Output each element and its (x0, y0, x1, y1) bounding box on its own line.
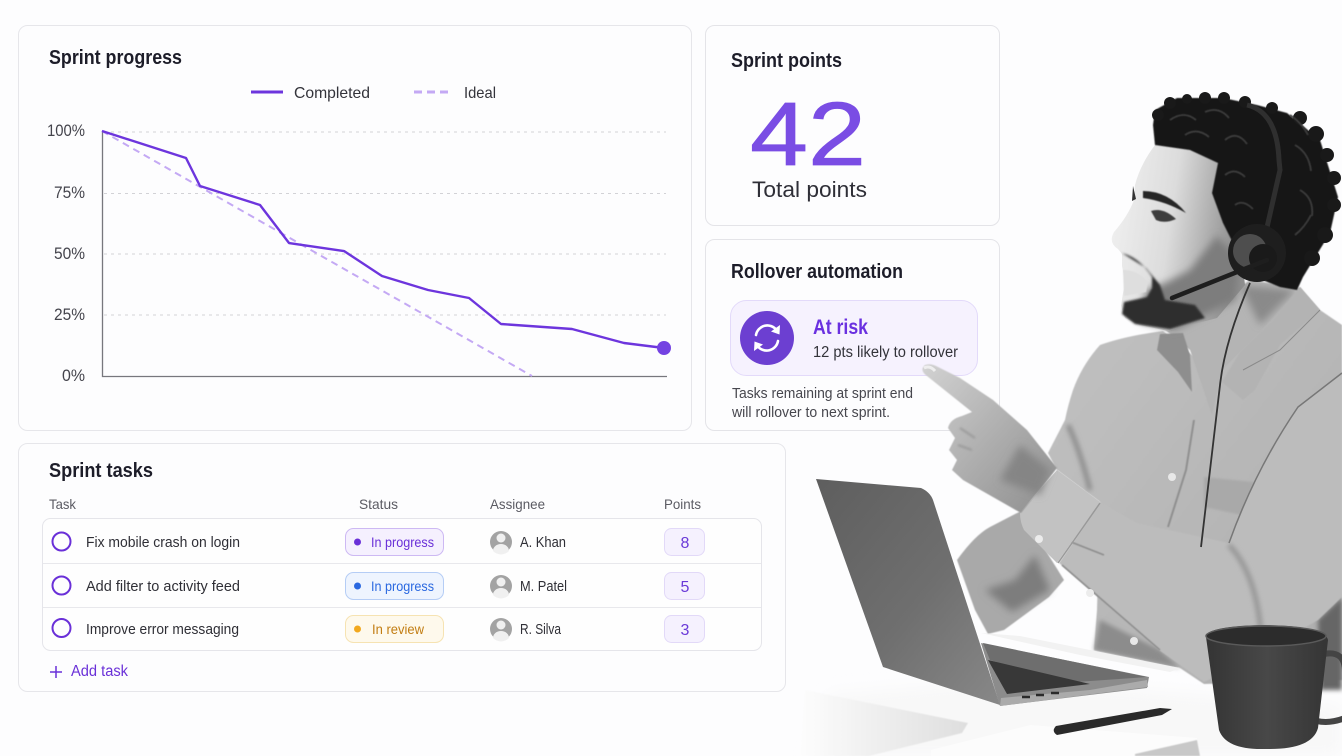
row: improve error: 3 (681, 622, 690, 639)
line chart (47, 121, 671, 385)
shirt cuff (1020, 470, 1100, 563)
laptop lid (816, 479, 1000, 705)
row: add filter: M. Patel (520, 578, 567, 595)
coffee mug (1206, 625, 1342, 749)
heading: sprint progress: Sprint progress (49, 47, 182, 69)
line chart: 0% (62, 366, 85, 385)
line chart: 25% (54, 305, 85, 324)
table frame (42, 518, 762, 650)
row: add filter: Add filter to activity feed (86, 578, 240, 595)
laptop (816, 479, 1180, 706)
callout: at risk (730, 300, 978, 376)
table header: Points (664, 496, 701, 512)
legend (251, 85, 496, 102)
hair (1152, 92, 1341, 290)
line chart: 50% (54, 244, 85, 263)
rollover note: will rollover to next sprint. (731, 405, 890, 421)
row: improve error: R. Silva (520, 621, 562, 638)
front arm sleeve (1020, 373, 1342, 682)
heading: sprint points: Sprint points (731, 50, 842, 72)
pen (1054, 708, 1172, 735)
legend: Ideal (464, 85, 496, 102)
table header: Assignee (490, 496, 545, 512)
pointing hand (922, 364, 1057, 513)
ideal line (102, 131, 532, 376)
metric label: Total points (752, 177, 867, 202)
notepad (931, 725, 1200, 756)
table header: Task (49, 496, 77, 512)
panel: sprint tasks (18, 444, 786, 692)
eye and brows (1143, 191, 1186, 213)
table header (49, 496, 701, 512)
row: improve error: In review (372, 621, 425, 637)
stubble (1140, 236, 1240, 330)
row: fix mobile crash (52, 528, 704, 556)
heading: sprint tasks: Sprint tasks (49, 460, 153, 482)
row: add filter (52, 572, 704, 600)
rollover note: Tasks remaining at sprint end (732, 386, 913, 402)
neck (1163, 280, 1298, 415)
desk (810, 680, 1342, 756)
row: fix mobile crash: Fix mobile crash on login (86, 534, 240, 551)
row: add filter: In progress (371, 578, 434, 594)
rear arm (957, 511, 1064, 634)
row: fix mobile crash: A. Khan (520, 534, 566, 551)
photo: man with headset at desk (800, 92, 1342, 756)
rollover note (731, 386, 913, 421)
legend: Completed (294, 85, 370, 102)
panel: sprint points (706, 26, 1000, 226)
row: improve error: Improve error messaging (86, 621, 239, 638)
line chart: 75% (54, 183, 85, 202)
desk strip behind laptop (981, 633, 1180, 672)
notebook (800, 690, 968, 756)
icon: rollover arrows (740, 311, 794, 365)
headset (1172, 105, 1286, 547)
add task: Add task (71, 663, 128, 680)
collar (1157, 287, 1320, 400)
line chart: 100% (47, 121, 85, 140)
table header: Status (359, 496, 398, 512)
head (1112, 92, 1341, 547)
row: fix mobile crash: In progress (371, 534, 434, 550)
row: add filter: 5 (681, 579, 690, 596)
beard (1122, 253, 1205, 329)
face (1112, 145, 1245, 331)
completed line (102, 131, 664, 348)
laptop base (981, 643, 1149, 706)
shirt torso (1048, 287, 1342, 690)
heading: rollover automation: Rollover automation (731, 261, 903, 283)
callout: at risk: At risk (813, 316, 868, 339)
callout: at risk: 12 pts likely to rollover (813, 344, 958, 361)
metric: 42: 42 (750, 85, 866, 185)
row: improve error (52, 616, 704, 642)
panel: sprint progress (18, 26, 692, 430)
panel: rollover automation (706, 240, 1000, 430)
row: fix mobile crash: 8 (681, 535, 690, 552)
end point (657, 341, 671, 355)
